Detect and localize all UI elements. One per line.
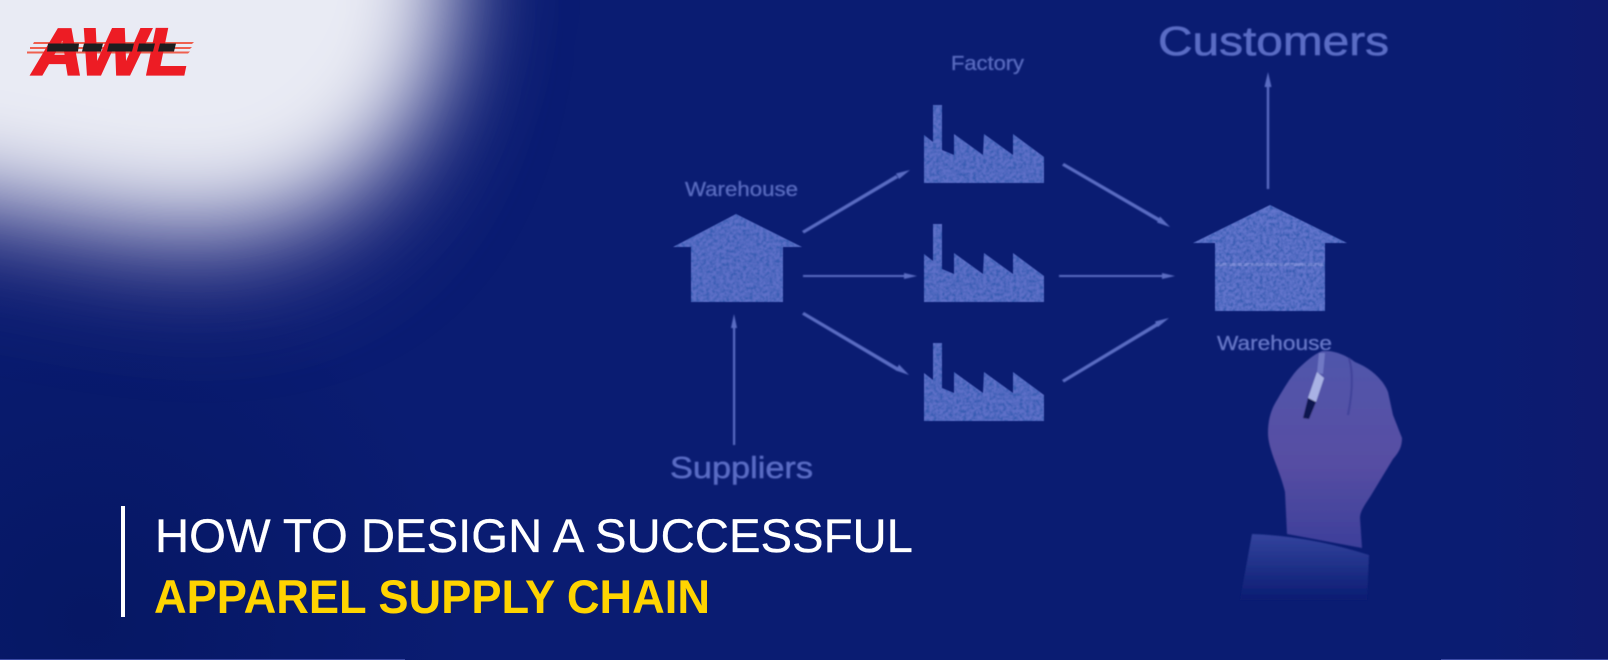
arrow: bottom factory to warehouse <box>1062 318 1169 382</box>
finger creases <box>1348 358 1352 415</box>
label: factory: Factory <box>951 53 1024 75</box>
logo: AWL <box>27 14 194 88</box>
label: customers: Customers <box>1158 18 1389 64</box>
title accent bar <box>121 506 125 617</box>
icon: factory middle <box>924 224 1044 302</box>
arrow: top factory to warehouse <box>1062 163 1170 227</box>
label: warehouse right: Warehouse <box>1217 333 1332 355</box>
shirt cuff <box>1240 534 1369 600</box>
label: suppliers: Suppliers <box>670 450 813 485</box>
bottom edge strips <box>0 659 1608 660</box>
white glow top-left <box>0 0 470 295</box>
supply chain diagram <box>670 18 1389 485</box>
hand <box>1268 351 1402 548</box>
icon: warehouse right <box>1193 205 1347 311</box>
icon: factory bottom <box>924 343 1044 421</box>
arrow: warehouse to top factory <box>802 170 910 234</box>
marker <box>1303 353 1325 419</box>
title line 1: HOW TO DESIGN A SUCCESSFUL <box>155 509 913 562</box>
arrow: warehouse to customers <box>1264 72 1272 189</box>
arrow: suppliers to warehouse <box>731 314 737 445</box>
label: warehouse left: Warehouse <box>685 179 798 201</box>
icon: warehouse left <box>673 214 802 302</box>
title line 2: APPAREL SUPPLY CHAIN <box>154 570 710 623</box>
logo letters: AWL <box>31 14 189 88</box>
logo black band <box>47 44 176 52</box>
hand with marker <box>1240 351 1402 600</box>
logo speed lines <box>27 42 194 54</box>
arrow: middle factory to warehouse <box>1059 273 1175 279</box>
icon: factory top <box>924 105 1044 183</box>
arrow: warehouse to middle factory <box>803 273 917 279</box>
arrow: warehouse to bottom factory <box>802 312 909 375</box>
